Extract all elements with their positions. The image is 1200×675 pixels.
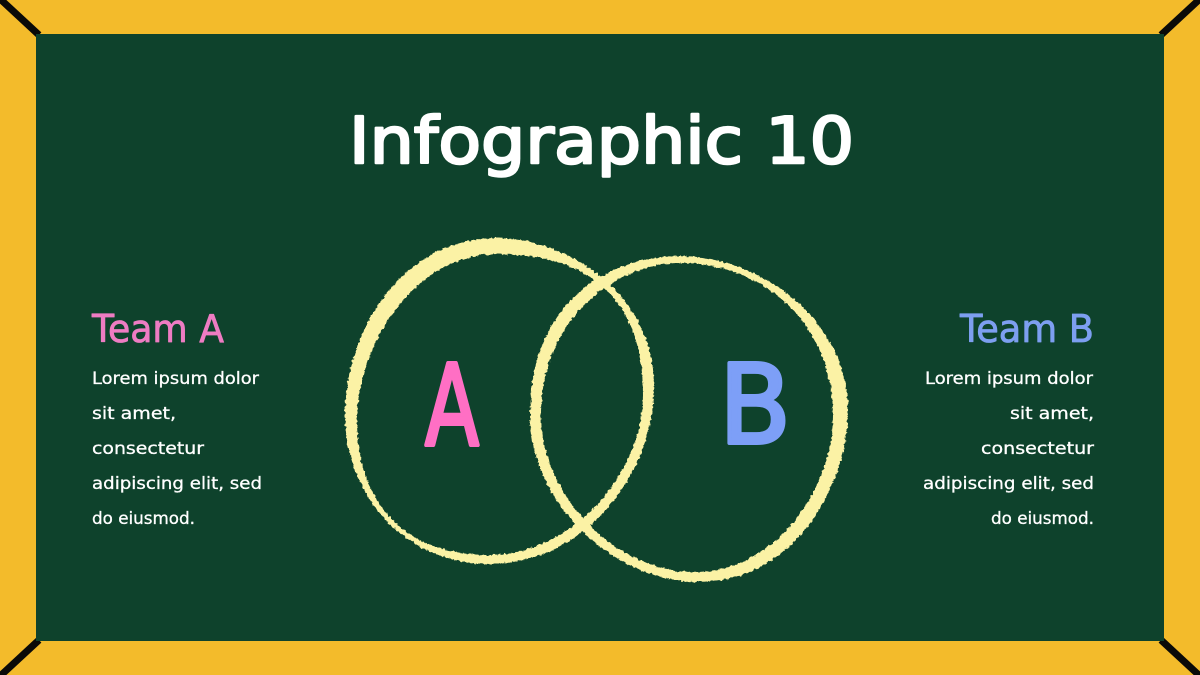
body text: team B <box>923 369 1094 529</box>
panel: team B text <box>923 307 1094 529</box>
body text: team B: do eiusmod. <box>991 509 1094 529</box>
letter A: A <box>425 342 479 472</box>
body text: team B: consectetur <box>981 439 1094 459</box>
venn diagram <box>345 238 848 582</box>
body text: team A: consectetur <box>92 439 204 459</box>
body text: team A: Lorem ipsum dolor <box>92 369 259 389</box>
body text: team A <box>92 369 262 529</box>
title: Infographic 10 <box>349 105 854 179</box>
body text: team B: sit amet, <box>1010 404 1094 424</box>
circle B chalk ring <box>530 256 848 582</box>
heading: Team B: Team B <box>959 307 1094 351</box>
body text: team A: adipiscing elit, sed <box>92 474 262 494</box>
panel: team A text <box>91 307 262 529</box>
circle A chalk ring <box>345 238 654 564</box>
body text: team A: sit amet, <box>92 404 176 424</box>
body text: team B: Lorem ipsum dolor <box>925 369 1093 389</box>
heading: Team A: Team A <box>91 307 224 351</box>
body text: team A: do eiusmod. <box>92 509 195 529</box>
letter B: B <box>719 341 791 469</box>
body text: team B: adipiscing elit, sed <box>923 474 1094 494</box>
